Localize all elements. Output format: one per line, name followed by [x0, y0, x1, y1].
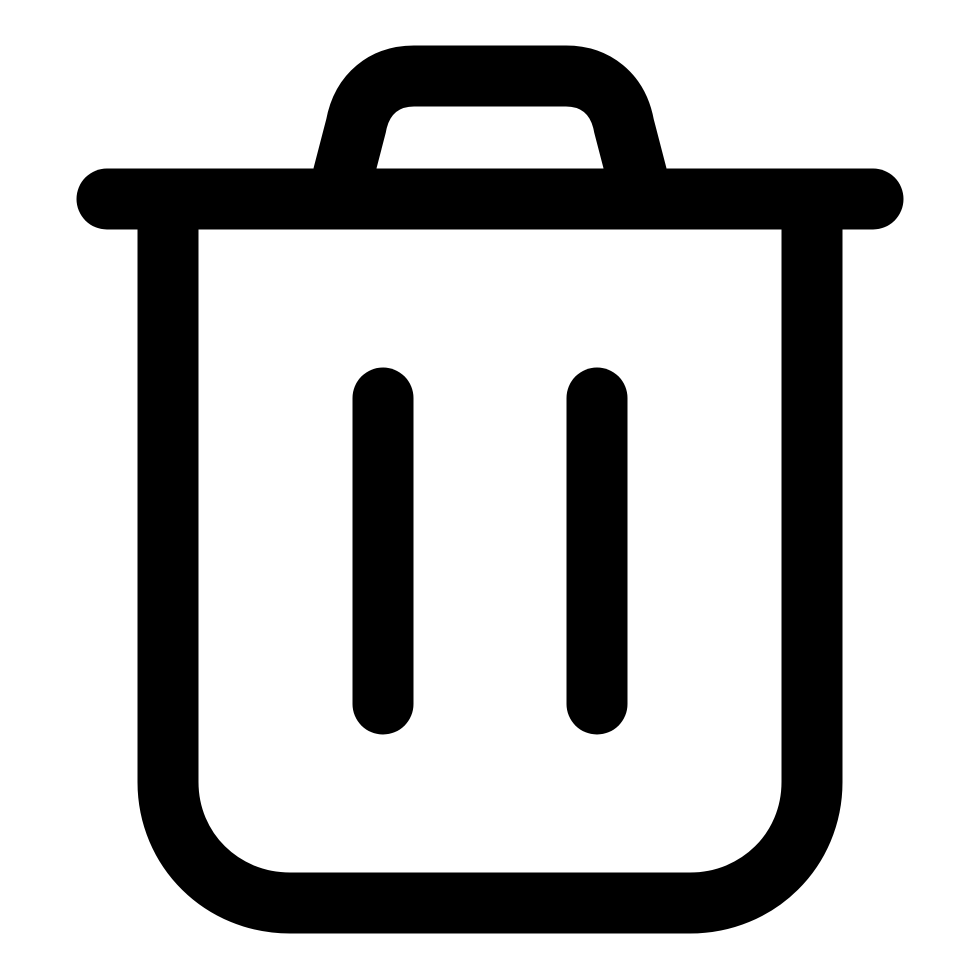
icon: left slot — [352, 398, 414, 704]
icon: lid bar — [107, 168, 873, 230]
icon: right slot — [566, 398, 628, 704]
icon: bin body — [168, 199, 812, 903]
icon: lid handle — [343, 76, 637, 176]
